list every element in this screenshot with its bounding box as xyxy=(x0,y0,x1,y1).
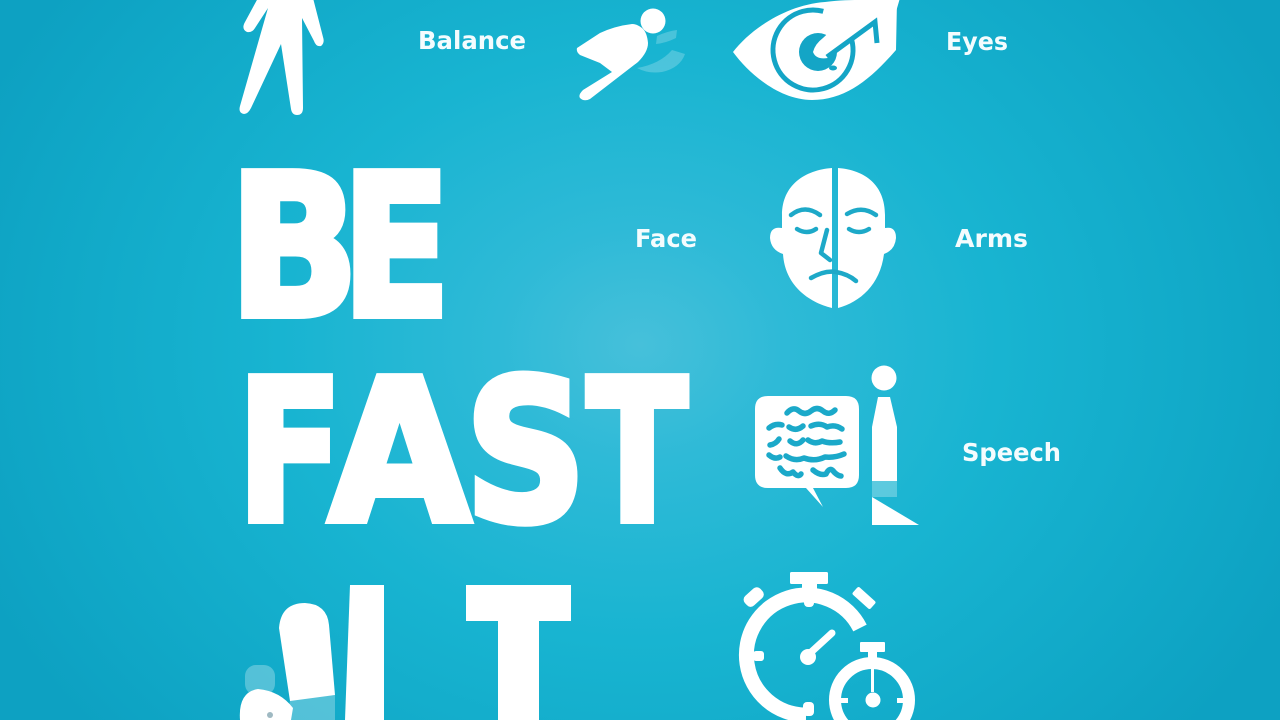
label: Speech: Speech xyxy=(962,438,1061,467)
label: Balance: Balance xyxy=(418,26,526,55)
icon: drooping face xyxy=(770,168,896,308)
label: Face: Face xyxy=(635,224,697,253)
icon: stopwatches xyxy=(742,572,909,720)
icon: hand with raised fingers xyxy=(240,603,335,720)
title: FAST: T xyxy=(587,338,687,566)
title: FAST: S xyxy=(465,339,586,567)
title: FAST xyxy=(237,338,687,567)
title: FAST: A xyxy=(329,338,470,567)
title: BE xyxy=(229,134,450,362)
icon: garbled speech bubble with person xyxy=(755,366,919,525)
label: Eyes: Eyes xyxy=(946,27,1008,56)
label: Arms: Arms xyxy=(955,224,1028,253)
icon: standing figure (balance) xyxy=(240,0,324,115)
icon: eye with arrow xyxy=(733,0,900,100)
title: IT xyxy=(345,585,571,720)
icon: falling person xyxy=(577,8,685,100)
title: BE: E xyxy=(342,134,450,362)
title: FAST: F xyxy=(237,338,343,567)
title: BE: B xyxy=(229,134,359,362)
